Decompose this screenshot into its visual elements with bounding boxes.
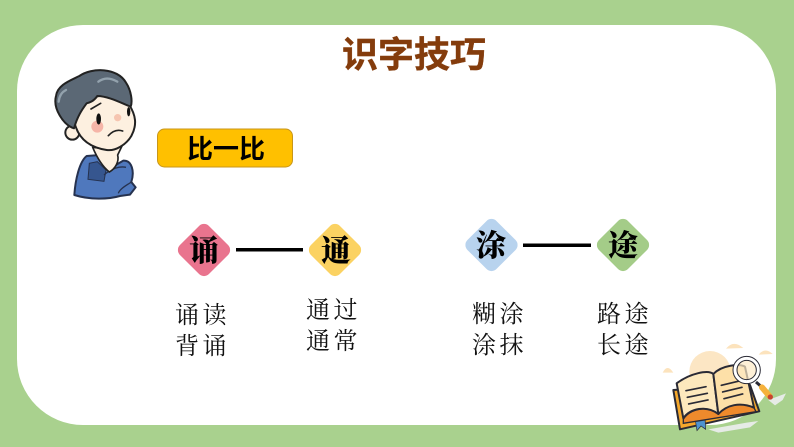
badge: 通 — [306, 221, 364, 279]
connector line — [523, 244, 591, 247]
group: 涂 and 途 — [463, 216, 652, 359]
words: 路途 长途: 长途 — [597, 332, 652, 359]
left page — [677, 372, 718, 418]
cheeks — [91, 121, 103, 133]
shadows — [708, 393, 786, 433]
badge: 诵: 诵 — [189, 235, 219, 268]
eyes, brow and mouth — [96, 113, 101, 125]
words: 路途 长途: 路途 — [597, 301, 652, 328]
words: 通过 通常: 通过 — [306, 297, 361, 324]
title: 识字技巧 — [342, 34, 486, 75]
book cover — [673, 385, 759, 429]
right page — [713, 365, 754, 414]
badge: 涂: 涂 — [476, 230, 508, 263]
group: 诵 and 通 — [175, 221, 364, 360]
icon: thinking boy — [55, 70, 136, 199]
words: 糊涂 涂抹: 涂抹 — [472, 332, 527, 359]
words: 诵读 背诵 — [175, 302, 230, 360]
magnifier lens — [737, 360, 757, 380]
badge: 途: 途 — [608, 230, 640, 263]
text lines — [686, 381, 743, 404]
sun and clouds — [689, 351, 731, 392]
badge: 涂 — [463, 216, 520, 274]
face — [75, 95, 135, 150]
words: 糊涂 涂抹: 糊涂 — [472, 301, 527, 328]
ear — [65, 126, 79, 140]
connector line — [236, 248, 303, 252]
hair — [55, 70, 132, 128]
icon: open book with magnifier — [663, 344, 786, 433]
hand — [93, 146, 122, 172]
badge: 通: 通 — [321, 235, 351, 268]
words: 糊涂 涂抹 — [472, 301, 527, 359]
badge: 途 — [594, 216, 652, 274]
body — [74, 155, 136, 199]
bookmark — [695, 418, 706, 431]
words: 路途 长途 — [597, 301, 652, 359]
button: compare label — [158, 129, 292, 167]
magnifier handle — [756, 382, 761, 387]
words: 诵读 背诵: 背诵 — [175, 333, 230, 360]
words: 通过 通常 — [306, 297, 361, 355]
button: compare label: 比一比 — [187, 134, 265, 164]
words: 诵读 背诵: 诵读 — [175, 302, 230, 329]
page edges — [683, 404, 756, 423]
words: 通过 通常: 通常 — [306, 328, 361, 355]
badge: 诵 — [175, 221, 233, 279]
